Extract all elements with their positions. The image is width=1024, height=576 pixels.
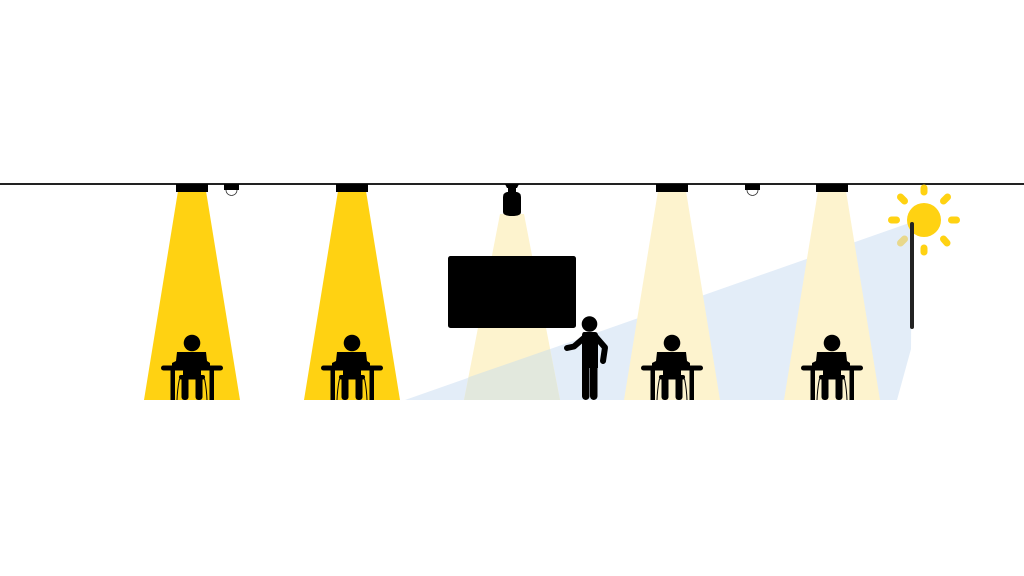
ceiling sensor 2 [745, 184, 760, 196]
light cone 2 (on) [304, 191, 400, 400]
teacher [567, 316, 605, 400]
ceiling fixture 1 [176, 184, 208, 192]
projector cone and daylight overlap [464, 349, 560, 400]
projector [503, 184, 521, 216]
ceiling line [0, 183, 1024, 185]
ceiling fixture 2 [336, 184, 368, 192]
student 2 [321, 335, 383, 400]
ceiling sensor 1 [224, 184, 239, 196]
projector light cone [464, 214, 560, 400]
light cone 5 (dimmed) [784, 191, 880, 400]
sun [892, 188, 956, 252]
ceiling fixture 4 [656, 184, 688, 192]
projection screen [448, 256, 576, 328]
student 5 [801, 335, 863, 400]
daylight beam from window [405, 222, 912, 400]
window pole [910, 222, 914, 329]
ceiling fixture 5 [816, 184, 848, 192]
student 4 [641, 335, 703, 400]
student 1 [161, 335, 223, 400]
light cone 1 (on) [144, 191, 240, 400]
light cone 4 (dimmed) [624, 191, 720, 400]
